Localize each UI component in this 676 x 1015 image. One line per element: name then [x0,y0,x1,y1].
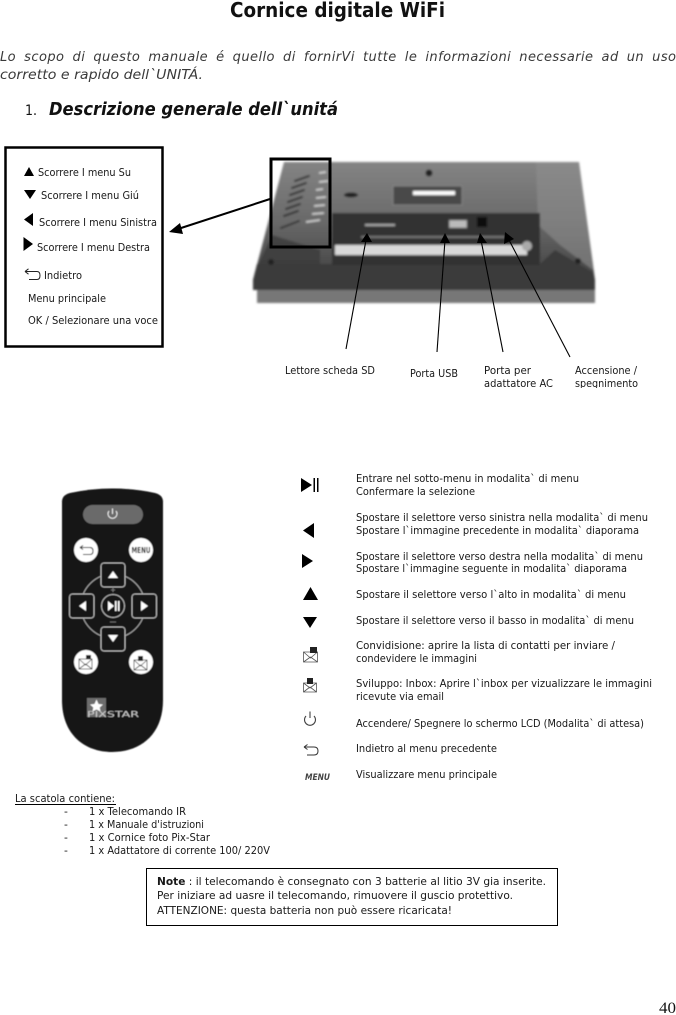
text: play/pause: Entrare nel sotto-menu in modalita` di menu [356,472,579,485]
icon: left [303,523,314,538]
text: power: Accendere/ Spegnere lo schermo LCD (Modalita` di attesa) [356,717,644,730]
box contents list: - [64,818,68,831]
note box: Per iniziare ad uasre il telecomando, rimuovere il guscio protettivo. [157,889,513,902]
label: power switch: Accensione / [575,364,637,377]
icon: down [303,617,317,628]
icon: up [303,587,318,600]
intro paragraph: corretto e rapido dell`UNITÁ. [0,67,203,83]
text: share: condevidere le immagini [356,652,477,665]
text: down: Spostare il selettore verso il basso in modalita` di menu [356,614,634,627]
icon: up triangle [24,167,34,176]
section heading: 1. [25,103,37,119]
label: scroll down: Scorrere I menu Giú [41,189,139,202]
text: play/pause [356,472,579,498]
box contents list [15,792,271,857]
remote: share button [74,650,98,674]
arrow: frame to legend [169,199,270,234]
label: scroll right: Scorrere I menu Destra [37,241,150,254]
arrow: AC adapter port [477,233,503,352]
callout frame on side buttons [271,159,330,247]
box contents list: - [64,831,68,844]
icon: right triangle [24,237,33,251]
label: scroll left: Scorrere I menu Sinistra [39,216,157,229]
label: main menu: Menu principale [28,292,106,305]
icon: down triangle [24,190,36,199]
remote: back button [74,538,98,562]
note box [146,868,558,926]
panel: button legend [6,148,162,346]
section heading: Descrizione generale dell`unitá [49,100,338,120]
icon: share mail [304,647,318,662]
icon: back [304,744,318,755]
label: ok: OK / Selezionare una voce [28,314,158,327]
text: right [356,550,643,575]
remote: logo [87,698,140,719]
label: scroll up: Scorrere I menu Su [38,166,131,179]
box contents list: - [64,844,68,857]
remote: menu button: MENU [132,546,150,555]
text: left: Spostare il selettore verso sinistra nella modalita` di menu [356,511,648,524]
box contents list: 1 x Cornice foto Pix-Star [89,831,211,844]
icon: play/pause [301,478,318,492]
text: share [356,639,615,665]
text: left [356,511,648,537]
text: menu: Visualizzare menu principale [356,768,497,781]
label: power switch [570,364,650,394]
text: inbox: ricevute via email [356,690,444,703]
remote: d-pad [70,563,156,651]
note box: Note : il telecomando è consegnato con 3 batterie al litio 3V gia inserite. [157,875,546,888]
icon: inbox mail [304,678,316,692]
box contents list: 1 x Telecomando IR [89,805,186,818]
label: SD reader: Lettore scheda SD [285,364,375,377]
text: inbox [356,677,652,703]
text: left: Spostare l`immagine precedente in modalita` diaporama [356,524,639,537]
icon: menu: MENU [305,773,331,783]
intro paragraph [0,50,676,83]
text: up: Spostare il selettore verso l`alto in modalita` di menu [356,588,626,601]
text: share: Convidisione: aprire la lista di contatti per inviare / [356,639,615,652]
remote: logo: PIXSTAR [87,710,140,719]
label: back: Indietro [44,269,82,282]
intro paragraph: Lo scopo di questo manuale é quello di fornirVi tutte le informazioni necessarie ad un uso [0,50,676,65]
text: inbox: Sviluppo: Inbox: Aprire l`inbox per vizualizzare le immagini [356,677,652,690]
arrow: power switch [504,232,570,357]
label: power switch: spegnimento [575,377,638,390]
text: back: Indietro al menu precedente [356,742,497,755]
icon: left triangle [24,213,33,226]
note box: ATTENZIONE: questa batteria non può essere ricaricata! [157,904,452,917]
icon: back arrow [25,269,40,280]
label: AC adapter port: Porta per [484,364,532,377]
arrow: USB port [437,233,450,352]
icon: right [302,554,313,568]
remote key legend [301,472,652,783]
icon: power [305,712,316,725]
remote: menu button [129,538,153,562]
remote: inbox button [129,650,153,674]
box contents list: La scatola contiene: [15,792,115,805]
text: right: Spostare l`immagine seguente in modalita` diaporama [356,562,627,575]
label: AC adapter port [484,364,553,390]
box contents list: - [64,805,68,818]
box contents list: 1 x Adattatore di corrente 100/ 220V [89,844,271,857]
label: AC adapter port: adattatore AC [484,377,553,390]
text: right: Spostare il selettore verso destra nella modalita` di menu [356,550,643,563]
text: play/pause: Confermare la selezione [356,485,475,498]
device photo [253,162,595,303]
box contents list: 1 x Manuale d'istruzioni [89,818,204,831]
arrow: SD reader [346,233,372,349]
remote control [62,488,163,752]
label: USB port: Porta USB [410,367,458,380]
remote: power button [83,505,143,524]
